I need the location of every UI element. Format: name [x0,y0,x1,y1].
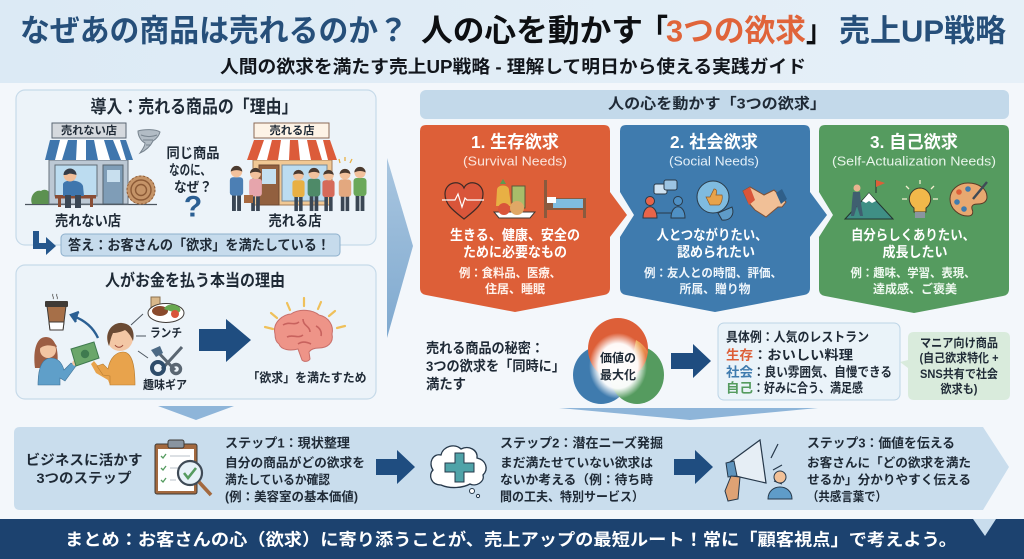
text: secret of selling: 3つの欲求を「同時に」 [426,358,565,374]
subtitle: 人間の欲求を満たす売上UP戦略 - 理解して明日から使える実践ガイド [220,56,806,77]
icon: banknote [71,342,99,366]
example box: restaurant: 自己 [726,380,753,396]
summary bar [0,519,1024,559]
example box: restaurant [718,323,900,400]
icon: climber and mountain [845,180,893,219]
card subtitle: social: (Social Needs) [669,154,759,168]
panel: social needs [620,125,827,312]
question text: なぜ？ [174,179,212,195]
step 1 text: 自分の商品がどの欲求を [225,455,365,470]
step 3 text: せるか」分かりやすく伝える [807,473,971,487]
icon: tornado [138,130,160,153]
icon: brain [265,298,345,361]
card text: survival: 生きる、健康、安全の [450,227,580,243]
callout: niche products [900,332,1010,400]
panel: introduction [16,90,376,256]
card examples: self [850,265,976,296]
icon: food [494,179,535,218]
icon: coffee cup [45,294,68,330]
panel: survival needs [420,125,627,312]
icon: people talking [643,180,685,218]
icon: curved arrow [71,312,98,338]
card text: survival: ために必要なもの [463,244,567,260]
example box: restaurant: ：良い雰囲気、自慢できる [753,364,892,380]
icon: unpopular shop [25,123,157,208]
title [20,14,1006,48]
step 1 text: (例：美容室の基本価値) [225,489,358,504]
icon: unpopular shop: 売れない店 [61,123,117,137]
icon: tumbleweed [126,176,156,204]
card examples: survival: 住居、睡眠 [485,281,545,296]
example box: restaurant: 具体例：人気のレストラン [726,330,869,344]
icon: man [91,323,135,385]
text: secret of selling: 満たす [426,376,466,392]
card text: self [851,227,975,260]
icon: popular shop [247,123,337,205]
title: 「 [640,14,668,48]
label: popular shop: 売れる店 [268,213,322,230]
card heading: survival: 1. 生存欲求 [471,132,559,152]
arrow: down from left column [158,406,234,420]
icon: thumbs-up bubble [697,181,733,220]
card examples: survival: 例：食料品、医療、 [459,265,561,280]
example box: restaurant: ：好みに合う、満足感 [753,380,863,396]
arrow: step 1 to 2 [376,450,415,484]
label: lunch: ランチ [150,326,182,340]
example box: restaurant: ：おいしい料理 [753,348,853,362]
step 3 text: ステップ3：価値を伝える [807,436,955,450]
steps heading [26,452,142,486]
panel heading: introduction: 導入：売れる商品の「理由」 [90,97,298,117]
example box: restaurant: 社会 [726,364,753,380]
icon: woman [34,337,78,385]
step 1 text [225,436,365,504]
icon: light bulb [902,180,938,218]
label: to satisfy desire: 「欲求」を満たすため [248,370,366,385]
text: secret of selling: 売れる商品の秘密： [426,340,544,356]
answer bar [61,234,340,256]
icon: handshake [743,187,787,217]
venn diagram: 最大化 [600,367,636,382]
step 2 text: ステップ2：潜在ニーズ発掘 [500,436,663,450]
icon: lunch plate [131,297,184,358]
heading bar: three needs: 人の心を動かす「3つの欲求」 [608,94,826,112]
small pointer [973,519,996,536]
step 3 text: （共感言葉で） [807,489,887,504]
icon: hobby gear [151,346,182,374]
card text: survival [450,227,580,260]
arrow: step 2 to 3 [674,450,713,484]
icon: clipboard and magnifier [155,440,211,495]
icon: question mark: ? [184,190,202,224]
title: 」 [806,14,832,48]
card text: social: 人とつながりたい、 [656,227,768,243]
panel heading: why people pay: 人がお金を払う本当の理由 [105,270,285,290]
heading bar: three needs [420,90,1009,119]
question text [166,145,220,195]
icon: heart [442,183,484,219]
step 2 text: 間の工夫、特別サービス） [500,489,644,504]
card heading: self: 3. 自己欲求 [870,132,958,152]
card examples: social [644,265,782,296]
step 2 text: まだ満たせていない欲求は [500,455,653,470]
panel: why people pay [16,265,376,399]
icon: bed [544,180,586,218]
step 1 text: ステップ1：現状整理 [225,436,350,450]
title: なぜあの商品は売れるのか？ [20,14,408,48]
panel: business steps [14,427,1009,510]
label: hobby gear: 趣味ギア [143,377,187,392]
step 3 text [807,436,971,504]
step 2 text: ないか考える（例：待ち時 [500,472,653,487]
answer bar: 答え：お客さんの「欲求」を満たしている！ [68,237,330,253]
card text: social [656,227,768,260]
steps heading: ビジネスに活かす [26,452,142,468]
summary text: まとめ：お客さんの心（欲求）に寄り添うことが、売上アップの最短ルート！常に「顧客視点」で考えよう。 [65,530,957,550]
title: 売上UP戦略 [839,14,1006,48]
icon: bent arrow [33,231,56,255]
card examples: self: 例：趣味、学習、表現、 [850,265,976,280]
callout: niche products: 欲求も) [940,381,978,396]
arrow: to example [671,344,711,378]
icon: palette [950,182,987,216]
card heading: social: 2. 社会欲求 [670,132,758,152]
title: 3つの欲求 [666,14,806,48]
venn diagram [573,318,664,404]
step 1 text: 満たしているか確認 [225,472,330,487]
example box: restaurant: 生存 [726,348,753,362]
arrow: down from needs [559,408,818,420]
steps heading: 3つのステップ [36,470,132,486]
icon: popular shop: 売れる店 [270,123,314,137]
step 3 text: お客さんに「どの欲求を満た [807,455,971,470]
card examples: social: 例：友人との時間、評価、 [644,265,782,280]
arrow: to brain [199,319,251,362]
card subtitle: self: (Self-Actualization Needs) [832,154,996,168]
header band [0,0,1024,83]
icon: customers queue [230,157,366,211]
callout: niche products: マニア向け商品 [920,335,998,350]
callout: niche products: SNS共有で社会 [920,366,998,381]
card text: social: 認められたい [677,244,755,260]
question text: なのに、 [169,162,211,178]
venn diagram: 価値の [600,350,636,365]
text: secret of selling [426,340,565,392]
card examples: social: 所属、贈り物 [680,281,750,296]
arrow: right chevron to needs [387,158,413,338]
card examples: survival [459,265,561,296]
question text: 同じ商品 [166,145,220,161]
callout: niche products: (自己欲求特化 + [920,350,998,365]
icon: thought cloud with plus [431,446,486,498]
step 2 text [500,436,663,504]
card subtitle: survival: (Survival Needs) [463,154,567,168]
icon: megaphone and person [725,440,792,501]
label: unpopular shop: 売れない店 [55,213,121,230]
title: 人の心を動かす [421,14,643,48]
card text: self: 成長したい [882,244,948,260]
card text: self: 自分らしくありたい、 [851,227,975,243]
panel: self-actualization needs [819,125,1009,313]
card examples: self: 達成感、ご褒美 [873,281,957,296]
